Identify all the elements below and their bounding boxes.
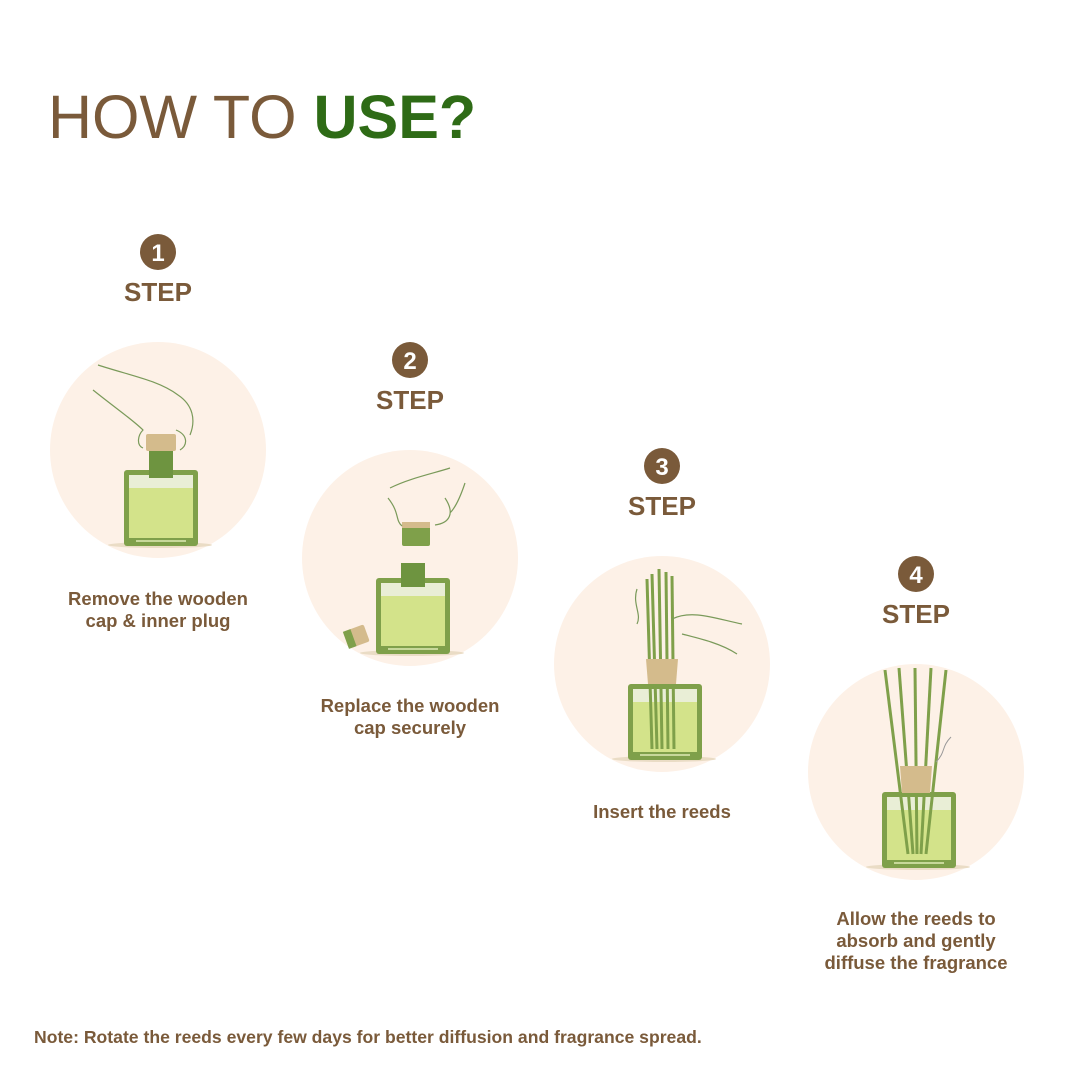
- caption step 2: cap securely: [354, 717, 466, 738]
- caption step 4: [824, 908, 1008, 973]
- step 2 illustration: [302, 450, 518, 666]
- step 4 badge: [882, 556, 950, 629]
- step 4 badge: 4: [909, 562, 923, 589]
- title: HOW TO USE?: [48, 83, 476, 151]
- step 2 badge: STEP: [376, 385, 444, 415]
- caption step 1: Remove the wooden: [68, 588, 248, 609]
- step 4 illustration: [808, 664, 1024, 880]
- step 1 badge: 1: [151, 240, 165, 267]
- step 4 badge: STEP: [882, 599, 950, 629]
- step 1 badge: STEP: [124, 277, 192, 307]
- step 3 badge: STEP: [628, 491, 696, 521]
- note: Note: Rotate the reeds every few days for better diffusion and fragrance spread.: [34, 1027, 702, 1047]
- caption step 1: [68, 588, 248, 631]
- step 3 illustration: [554, 556, 770, 772]
- caption step 4: diffuse the fragrance: [824, 952, 1008, 973]
- step 3 badge: 3: [655, 454, 669, 481]
- step 2 badge: [376, 342, 444, 415]
- caption step 4: absorb and gently: [836, 930, 996, 951]
- step 3 badge: [628, 448, 696, 521]
- caption step 2: Replace the wooden: [321, 695, 499, 716]
- step 1 illustration: [50, 342, 266, 558]
- step 2 badge: 2: [403, 348, 417, 375]
- caption step 4: Allow the reeds to: [836, 908, 996, 929]
- step 1 badge: [124, 234, 192, 307]
- caption step 3: Insert the reeds: [593, 801, 731, 822]
- caption step 1: cap & inner plug: [86, 610, 230, 631]
- caption step 2: [321, 695, 499, 738]
